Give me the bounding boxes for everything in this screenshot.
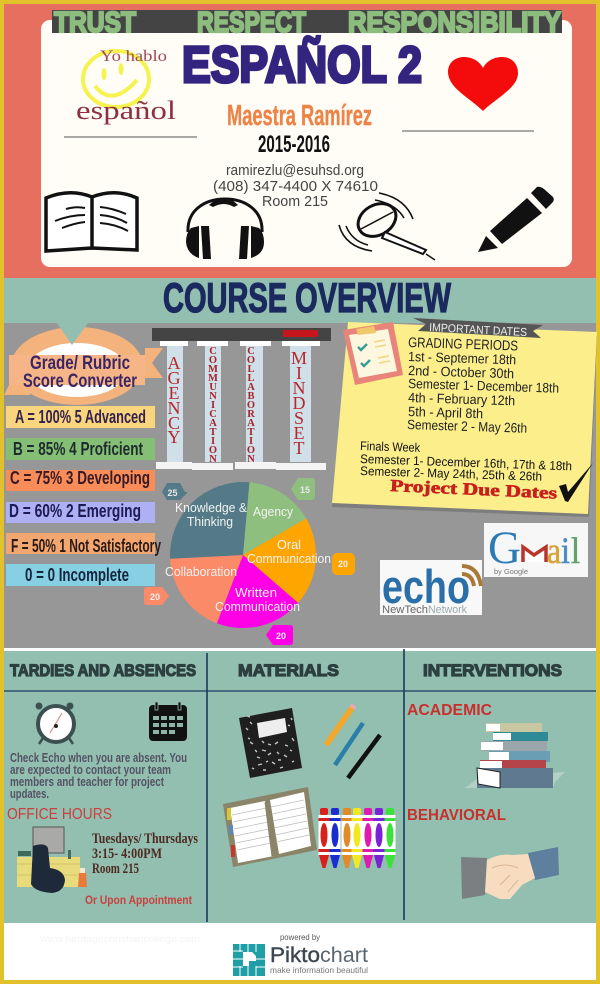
grade C [6, 468, 155, 491]
icon: composition notebook [239, 708, 302, 778]
value bubble: salmon 20: 20 [150, 592, 160, 602]
value bubble: pink 20: 20 [276, 631, 286, 641]
teacher name: Maestra Ramírez [227, 100, 372, 132]
finals week text: Semester 1- December 16th, 17th & 18th [360, 452, 572, 473]
logo: gmail [484, 522, 588, 577]
pillar label: agency: G [168, 368, 180, 388]
values banner [52, 7, 562, 39]
pie labels: Oral [277, 538, 301, 552]
values banner: TRUST [54, 7, 136, 39]
pillar label: collaboration: A [247, 382, 255, 393]
icon: alarm clock [36, 702, 74, 744]
office hours schedule: Tuesdays/ Thursdays [92, 831, 198, 847]
panel: footer [4, 923, 596, 980]
icon: stack of books [465, 723, 565, 788]
pillar label: collaboration: O [247, 445, 255, 456]
pillar label: communication: O [209, 355, 217, 366]
logo: piktochart: Pikto [270, 944, 320, 967]
value bubble: 25 [162, 483, 188, 500]
logo: gmail: G [488, 522, 521, 574]
pillar label: agency [168, 353, 180, 447]
pie labels: Collaboration [165, 565, 237, 579]
pillar label: collaboration: L [247, 373, 255, 384]
grade A [6, 406, 155, 428]
school year: 2015-2016 [258, 131, 330, 158]
logo: gmail: i [561, 531, 570, 572]
grading periods text: 4th - February 12th [408, 390, 515, 408]
grade 0: 0 = 0 Incomplete [25, 565, 129, 585]
academic heading: ACADEMIC [407, 702, 492, 719]
pillar label: agency: A [168, 353, 180, 373]
value bubble: salmon 20 [144, 587, 169, 605]
icon: smiley with Yo hablo español: español [76, 96, 176, 125]
value bubble: 15: 15 [300, 485, 310, 495]
panel: materials [223, 661, 396, 868]
pillar label: mindset [291, 348, 307, 458]
value bubble: orange 20: 20 [338, 559, 348, 569]
pillar label: collaboration: C [247, 346, 255, 357]
pillar label: mindset: E [294, 423, 304, 443]
grade C: C = 75% 3 Developing [10, 468, 150, 488]
pillar label: communication: N [209, 454, 217, 465]
pillar label: communication: I [211, 436, 215, 447]
panel: bottom section background [4, 648, 596, 923]
logo: piktochart: chart [320, 944, 368, 967]
logo: gmail: l [571, 531, 580, 572]
icon: pencil and pens [326, 705, 380, 778]
body text [10, 751, 187, 801]
body text: Check Echo when you are absent. You [10, 751, 187, 765]
pillar label: collaboration [247, 346, 255, 465]
icon: handshake [461, 847, 559, 899]
grading periods text: 2nd - October 30th [408, 363, 514, 381]
badge: grade rubric score converter: Score Converter [23, 371, 137, 392]
pie labels: Knowledge & [175, 501, 248, 515]
panel: interventions [407, 661, 565, 899]
value bubble: 25: 25 [167, 488, 178, 498]
office hours schedule: 3:15- 4:00PM [92, 846, 162, 862]
pillar label: communication: O [209, 445, 217, 456]
icon: check mark [559, 463, 593, 502]
grade B: B = 85% 4 Proficient [13, 439, 143, 459]
badge: grade rubric score converter: Grade/ Rubric [30, 353, 130, 374]
pillar label: mindset: I [296, 363, 302, 383]
grade D: D = 60% 2 Emerging [9, 501, 141, 521]
office hours heading: OFFICE HOURS [7, 806, 112, 823]
pillar label: communication: M [208, 373, 218, 384]
grading periods text: Semester 1- December 18th [408, 376, 559, 396]
finals week text [360, 439, 572, 484]
pillar label: collaboration: O [247, 355, 255, 366]
pillar label: mindset: M [291, 348, 307, 368]
finals week text: Semester 2- May 24th, 25th & 26th [360, 464, 542, 484]
contact details [213, 163, 378, 210]
heading: COURSE OVERVIEW [163, 274, 451, 321]
divider lines [64, 131, 534, 137]
grading periods text: Semester 2 - May 26th [407, 417, 527, 436]
pillar label: communication: T [209, 427, 217, 438]
logo: gmail: by Google [494, 569, 528, 576]
heading: TARDIES AND ABSENCES [10, 661, 196, 680]
pie labels: Agency [253, 505, 294, 519]
pillar label: agency: C [168, 413, 180, 433]
grading periods text [407, 334, 559, 436]
value bubble: orange 20 [332, 553, 355, 575]
grading periods text: GRADING PERIODS [408, 334, 518, 353]
icon: desk and chair [17, 827, 87, 893]
panel: important dates note [332, 318, 597, 517]
logo: echo: NewTech [382, 604, 428, 616]
body text: updates. [10, 787, 49, 801]
pillar label: communication: M [208, 364, 218, 375]
pillar label: collaboration: B [247, 391, 255, 402]
body text: are expected to contact your team [10, 763, 171, 777]
logo: echo: echo [382, 560, 470, 613]
title: ESPAÑOL 2 [182, 35, 422, 93]
icon: smiley with Yo hablo español [76, 48, 176, 125]
pillar label: collaboration: N [247, 454, 255, 465]
pillar label: collaboration: O [247, 400, 255, 411]
pillar label: communication: N [209, 391, 217, 402]
heading: MATERIALS [238, 661, 339, 680]
icon: open binder [223, 787, 317, 867]
grade F [6, 533, 161, 556]
badge: grade rubric score converter [4, 323, 163, 405]
project due dates: Project Due Dates [390, 476, 558, 503]
icon: pencil [478, 187, 554, 252]
values banner: RESPONSIBILITY [348, 7, 561, 39]
pillar label: communication: U [209, 382, 217, 393]
pillar label: communication: C [209, 346, 217, 357]
grading periods text: 1st - Septemer 18th [408, 349, 516, 367]
icon: open book [46, 193, 137, 251]
pillar label: mindset: S [294, 408, 304, 428]
heading: INTERVENTIONS [423, 661, 562, 680]
powered by: powered by [280, 933, 320, 942]
pillar label: mindset: T [294, 438, 304, 458]
four pillars [152, 328, 331, 470]
finals week text: Finals Week [360, 439, 421, 455]
pie labels: Written [235, 586, 277, 600]
pillar label: agency: N [168, 398, 180, 418]
logo: echo: Network [428, 604, 467, 616]
contact details: Room 215 [262, 194, 328, 210]
icon: markers [318, 808, 396, 868]
pillar label: collaboration: R [247, 409, 255, 420]
pillar label: agency: Y [168, 427, 180, 447]
icon: headphones [186, 198, 264, 259]
office hours schedule: Room 215 [92, 861, 139, 877]
logo: piktochart: make information beautiful [270, 965, 368, 975]
pie labels: Communication [247, 552, 331, 566]
pillar label: collaboration: A [247, 418, 255, 429]
panel: tardies and absences [7, 661, 198, 907]
office hours schedule [92, 831, 198, 877]
appointment note: Or Upon Appointment [85, 895, 192, 907]
ribbon: important dates [413, 318, 543, 339]
contact details: (408) 347-4400 X 74610 [213, 179, 378, 195]
pillar label: mindset: D [292, 393, 306, 413]
icon: microphone [339, 193, 435, 260]
grade F: F = 50% 1 Not Satisfactory [11, 536, 161, 556]
pie labels [165, 501, 331, 614]
ribbon: important dates: IMPORTANT DATES [429, 322, 528, 339]
pie chart [144, 478, 355, 645]
body text: members and teacher for project [10, 775, 165, 789]
icon: heart [448, 57, 518, 111]
pie labels: Communication [215, 600, 300, 614]
contact details: ramirezlu@esuhsd.org [226, 163, 364, 179]
panel: course overview [4, 274, 597, 648]
watermark text: www.heritagechristiancollege.com [39, 934, 200, 944]
pillar label: mindset: N [292, 378, 306, 398]
value bubble: 15 [291, 478, 315, 500]
panel: header [4, 4, 596, 278]
pie labels: Thinking [187, 515, 233, 529]
grading periods text: 5th - April 8th [408, 404, 483, 421]
pillar label: communication: C [209, 409, 217, 420]
behavioral heading: BEHAVIORAL [407, 807, 506, 824]
pillar label: collaboration: T [247, 427, 255, 438]
pillar label: agency: E [168, 383, 180, 403]
grade scale list [6, 406, 161, 586]
pillar label: collaboration: I [249, 436, 253, 447]
logo: piktochart [233, 944, 368, 976]
value bubble: pink 20 [266, 625, 293, 645]
pillar label: collaboration: L [247, 364, 255, 375]
logo: gmail: a [547, 531, 561, 572]
grade A: A = 100% 5 Advanced [15, 407, 146, 427]
icon: smiley with Yo hablo español: Yo hablo [100, 48, 167, 65]
pillar label: communication: I [211, 400, 215, 411]
pillar label: communication: A [209, 418, 217, 429]
values banner: RESPECT [197, 7, 306, 39]
pillar label: communication [208, 346, 218, 465]
icon: calendar [149, 702, 187, 741]
icon: clipboard [343, 322, 403, 385]
